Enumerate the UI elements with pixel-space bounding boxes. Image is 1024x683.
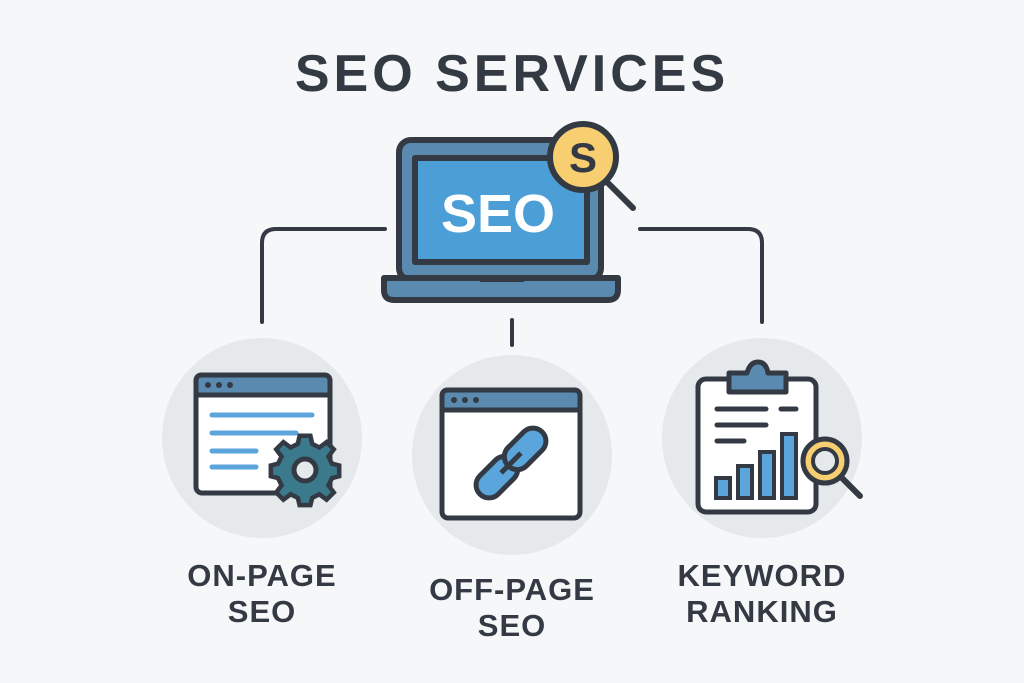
icon: laptop: SEO bbox=[441, 184, 555, 244]
label: off-page seo: OFF-PAGE bbox=[429, 572, 595, 607]
panel: off-page seo bbox=[412, 355, 612, 643]
panel: keyword ranking: RANKING bbox=[686, 594, 838, 629]
icon: laptop bbox=[384, 124, 633, 300]
icon: laptop: S bbox=[569, 134, 597, 181]
panel: off-page seo: SEO bbox=[478, 608, 546, 643]
label: on-page seo: ON-PAGE bbox=[187, 558, 337, 593]
icon: browser with link bbox=[442, 390, 580, 518]
label: keyword ranking: KEYWORD bbox=[678, 558, 846, 593]
icon: clipboard chart bbox=[698, 362, 860, 512]
panel: on-page seo bbox=[162, 338, 362, 629]
panel: on-page seo: SEO bbox=[228, 594, 296, 629]
panel: keyword ranking bbox=[662, 338, 862, 629]
connector lines bbox=[262, 229, 762, 345]
title: SEO SERVICES bbox=[295, 45, 729, 103]
icon: browser with gear bbox=[196, 375, 339, 505]
